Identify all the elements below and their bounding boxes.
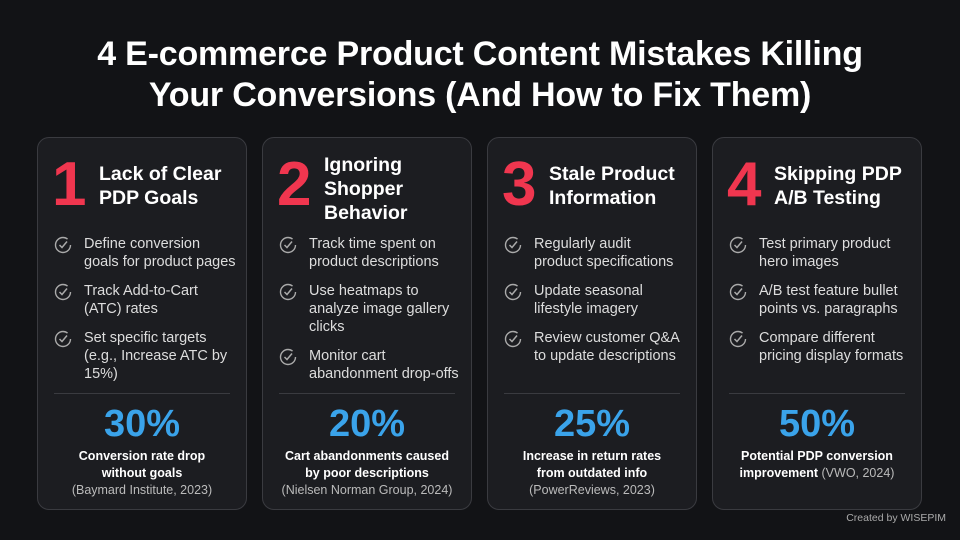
checklist 2: analyze image gallery [309, 301, 449, 317]
number 1: 1 [52, 150, 86, 219]
heading 2: Behavior [324, 202, 407, 224]
title: Your Conversions (And How to Fix Them) [149, 76, 811, 114]
checklist 4: hero images [759, 254, 839, 270]
panel: mistake 1 [37, 137, 247, 510]
caption 4 [740, 449, 894, 480]
title: 4 E-commerce Product Content Mistakes Killing [97, 35, 863, 73]
panel: mistake 4 [712, 137, 922, 510]
caption 2: by poor descriptions [305, 466, 429, 480]
heading 1: Lack of Clear [99, 163, 221, 185]
stat 1: 30% [104, 403, 180, 445]
caption 3: from outdated info [537, 466, 647, 480]
checklist 4: Compare different [759, 330, 875, 346]
heading 3: Stale Product [549, 163, 675, 185]
checklist 3: Update seasonal [534, 283, 643, 299]
number 3: 3 [502, 150, 536, 219]
heading 2: Ignoring [324, 154, 402, 176]
checklist 2: Use heatmaps to [309, 283, 419, 299]
heading 3 [549, 163, 675, 209]
caption 2: Cart abandonments caused [285, 449, 449, 463]
caption 1: (Baymard Institute, 2023) [72, 483, 212, 497]
checklist 3: product specifications [534, 254, 673, 270]
heading 4: Skipping PDP [774, 163, 902, 185]
checklist 1: (e.g., Increase ATC by [84, 348, 227, 364]
panel: mistake 2 [262, 137, 472, 510]
checklist 1: goals for product pages [84, 254, 236, 270]
caption 4: Potential PDP conversion [741, 449, 893, 463]
caption 3: Increase in return rates [523, 449, 661, 463]
checklist 1: 15%) [84, 366, 118, 382]
stat 3: 25% [554, 403, 630, 445]
checklist 3: lifestyle imagery [534, 301, 638, 317]
caption 3: (PowerReviews, 2023) [529, 483, 655, 497]
caption 1 [72, 449, 212, 497]
heading 2: Shopper [324, 178, 403, 200]
checklist 4: A/B test feature bullet [759, 283, 898, 299]
number 2: 2 [277, 150, 311, 219]
credit: Created by WISEPIM [846, 512, 946, 524]
panel: mistake 3 [487, 137, 697, 510]
checklist 1: Set specific targets [84, 330, 206, 346]
checklist 2 [280, 236, 459, 382]
heading 3: Information [549, 187, 656, 209]
checklist 1: (ATC) rates [84, 301, 158, 317]
checklist 4: Test primary product [759, 236, 890, 252]
checklist 1: Track Add-to-Cart [84, 283, 198, 299]
title [97, 35, 863, 114]
checklist 3: Review customer Q&A [534, 330, 680, 346]
checklist 3: Regularly audit [534, 236, 631, 252]
checklist 1 [54, 236, 236, 382]
stat 4: 50% [779, 403, 855, 445]
checklist 2: product descriptions [309, 254, 439, 270]
caption 4: improvement (VWO, 2024) [740, 466, 894, 480]
heading 1: PDP Goals [99, 187, 198, 209]
checklist 3 [504, 236, 680, 364]
checklist 3: to update descriptions [534, 348, 676, 364]
heading 1 [99, 163, 222, 209]
checklist 2: Monitor cart [309, 348, 386, 364]
checklist 4: pricing display formats [759, 348, 903, 364]
stat 2: 20% [329, 403, 405, 445]
caption 2: (Nielsen Norman Group, 2024) [282, 483, 452, 497]
caption 1: without goals [102, 466, 182, 480]
checklist 4: points vs. paragraphs [759, 301, 898, 317]
number 4: 4 [727, 150, 761, 219]
checklist 1: Define conversion [84, 236, 200, 252]
checklist 4 [730, 236, 903, 364]
checklist 2: abandonment drop-offs [309, 366, 459, 382]
checklist 2: clicks [309, 319, 344, 335]
heading 4 [774, 163, 902, 209]
heading 2 [324, 154, 408, 224]
caption 3 [523, 449, 661, 497]
caption 1: Conversion rate drop [79, 449, 205, 463]
checklist 2: Track time spent on [309, 236, 436, 252]
caption 2 [282, 449, 452, 497]
heading 4: A/B Testing [774, 187, 881, 209]
